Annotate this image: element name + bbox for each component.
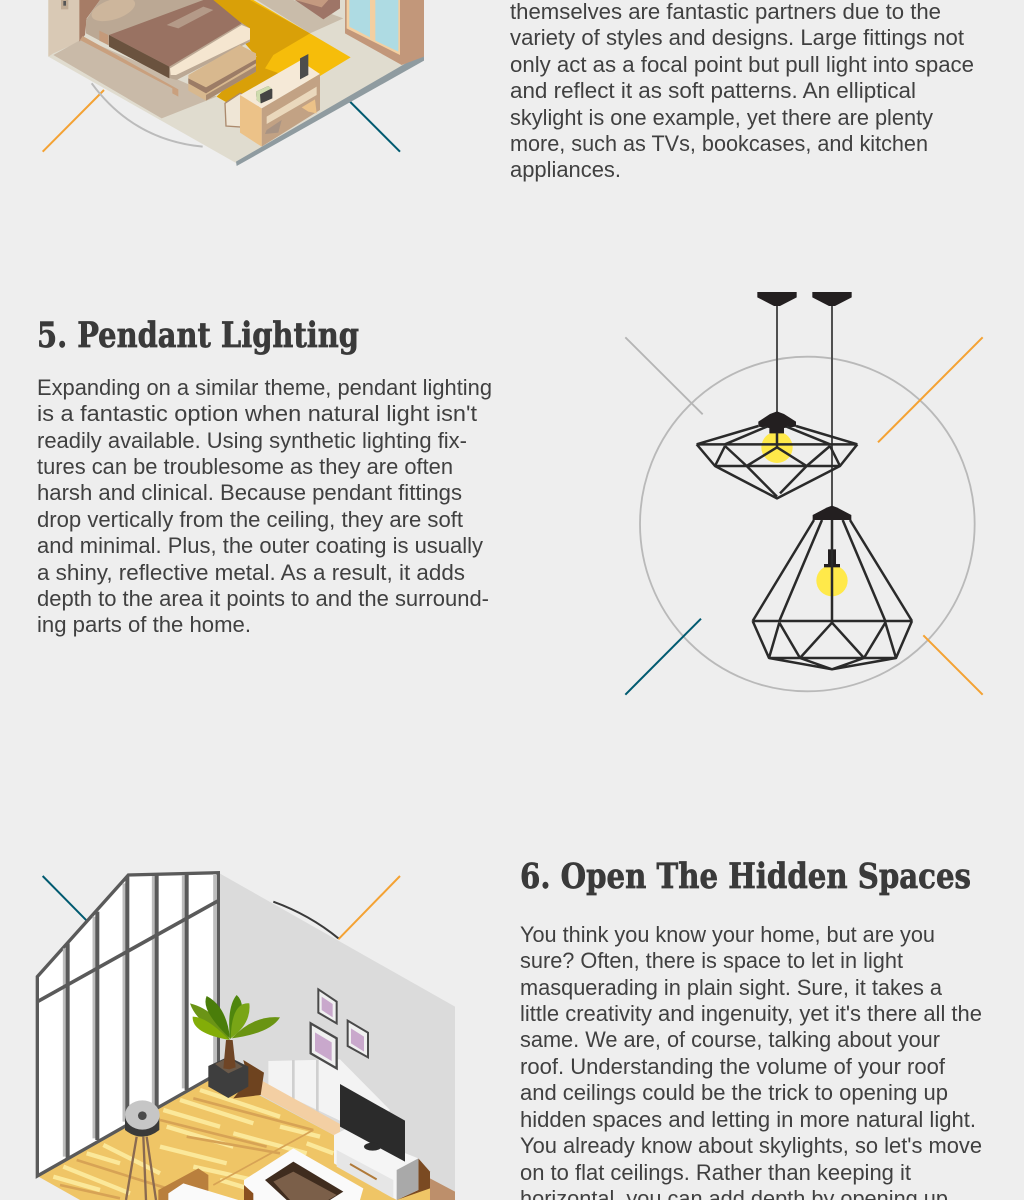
icon: potted palm [190,995,280,1098]
text block: hidden spaces paragraph: roof. Understanding the volume of your roof [520,1054,946,1079]
text block: skylight and fittings paragraph: variety of styles and designs. Large fittings not [510,25,964,50]
text block: hidden spaces paragraph: little creativity and ingenuity, yet it's there all the [520,1001,982,1026]
text block: hidden spaces paragraph: masquerading in plain sight. Sure, it takes a [520,975,943,1000]
text block: hidden spaces paragraph: hidden spaces and letting in more natural light. [520,1107,976,1132]
illustration: isometric bedroom [43,0,424,166]
text block: skylight and fittings paragraph: and reflect it as soft patterns. An elliptical [510,78,916,103]
text block: hidden spaces paragraph: and ceilings could be the trick to opening up [520,1080,948,1105]
text block: pendant lighting paragraph: ing parts of the home. [37,612,251,637]
text block: hidden spaces paragraph: You think you know your home, but are you [520,922,935,947]
icon: floor lamp [125,1100,160,1200]
text block: skylight and fittings paragraph [510,0,974,182]
text block: pendant lighting paragraph: a shiny, reflective metal. As a result, it adds [37,560,465,585]
text block: hidden spaces paragraph: on to flat ceilings. Rather than keeping it [520,1160,911,1185]
text block: pendant lighting paragraph: depth to the area it points to and the surround- [37,586,489,611]
text block: hidden spaces paragraph [520,922,982,1200]
illustration: living room with tall window [37,873,455,1200]
text block: hidden spaces paragraph: You already know about skylights, so let's move [520,1133,982,1158]
text block: skylight and fittings paragraph: skylight is one example, yet there are plenty [510,105,933,130]
icon: TV on white stand [334,1084,430,1200]
illustration: pendant lamps [625,292,983,695]
text block: skylight and fittings paragraph: only act as a focal point but pull light into space [510,52,974,77]
icon: wall frames [311,989,368,1068]
text block: pendant lighting paragraph: harsh and clinical. Because pendant fittings [37,480,462,505]
text block: pendant lighting paragraph: and minimal. Plus, the outer coating is usually [37,533,483,558]
text block: pendant lighting paragraph [37,375,492,637]
text block: pendant lighting paragraph: Expanding on a similar theme, pendant lighting [37,375,492,400]
text block: hidden spaces paragraph: same. We are, of course, talking about your [520,1027,940,1052]
text block: hidden spaces paragraph: sure? Often, there is space to let in light [520,948,903,973]
heading: 5. Pendant Lighting: 5. Pendant Lighting [37,315,359,356]
text block: skylight and fittings paragraph: more, such as TVs, bookcases, and kitchen [510,131,928,156]
text block: skylight and fittings paragraph: appliances. [510,157,621,182]
text block: pendant lighting paragraph: is a fantastic option when natural light isn't [37,401,477,426]
text block: pendant lighting paragraph: tures can be troublesome as they are often [37,454,453,479]
icon: coffee table and sofa [158,1148,363,1200]
text block: pendant lighting paragraph: readily available. Using synthetic lighting fix- [37,428,467,453]
text block: pendant lighting paragraph: drop vertically from the ceiling, they are soft [37,507,463,532]
